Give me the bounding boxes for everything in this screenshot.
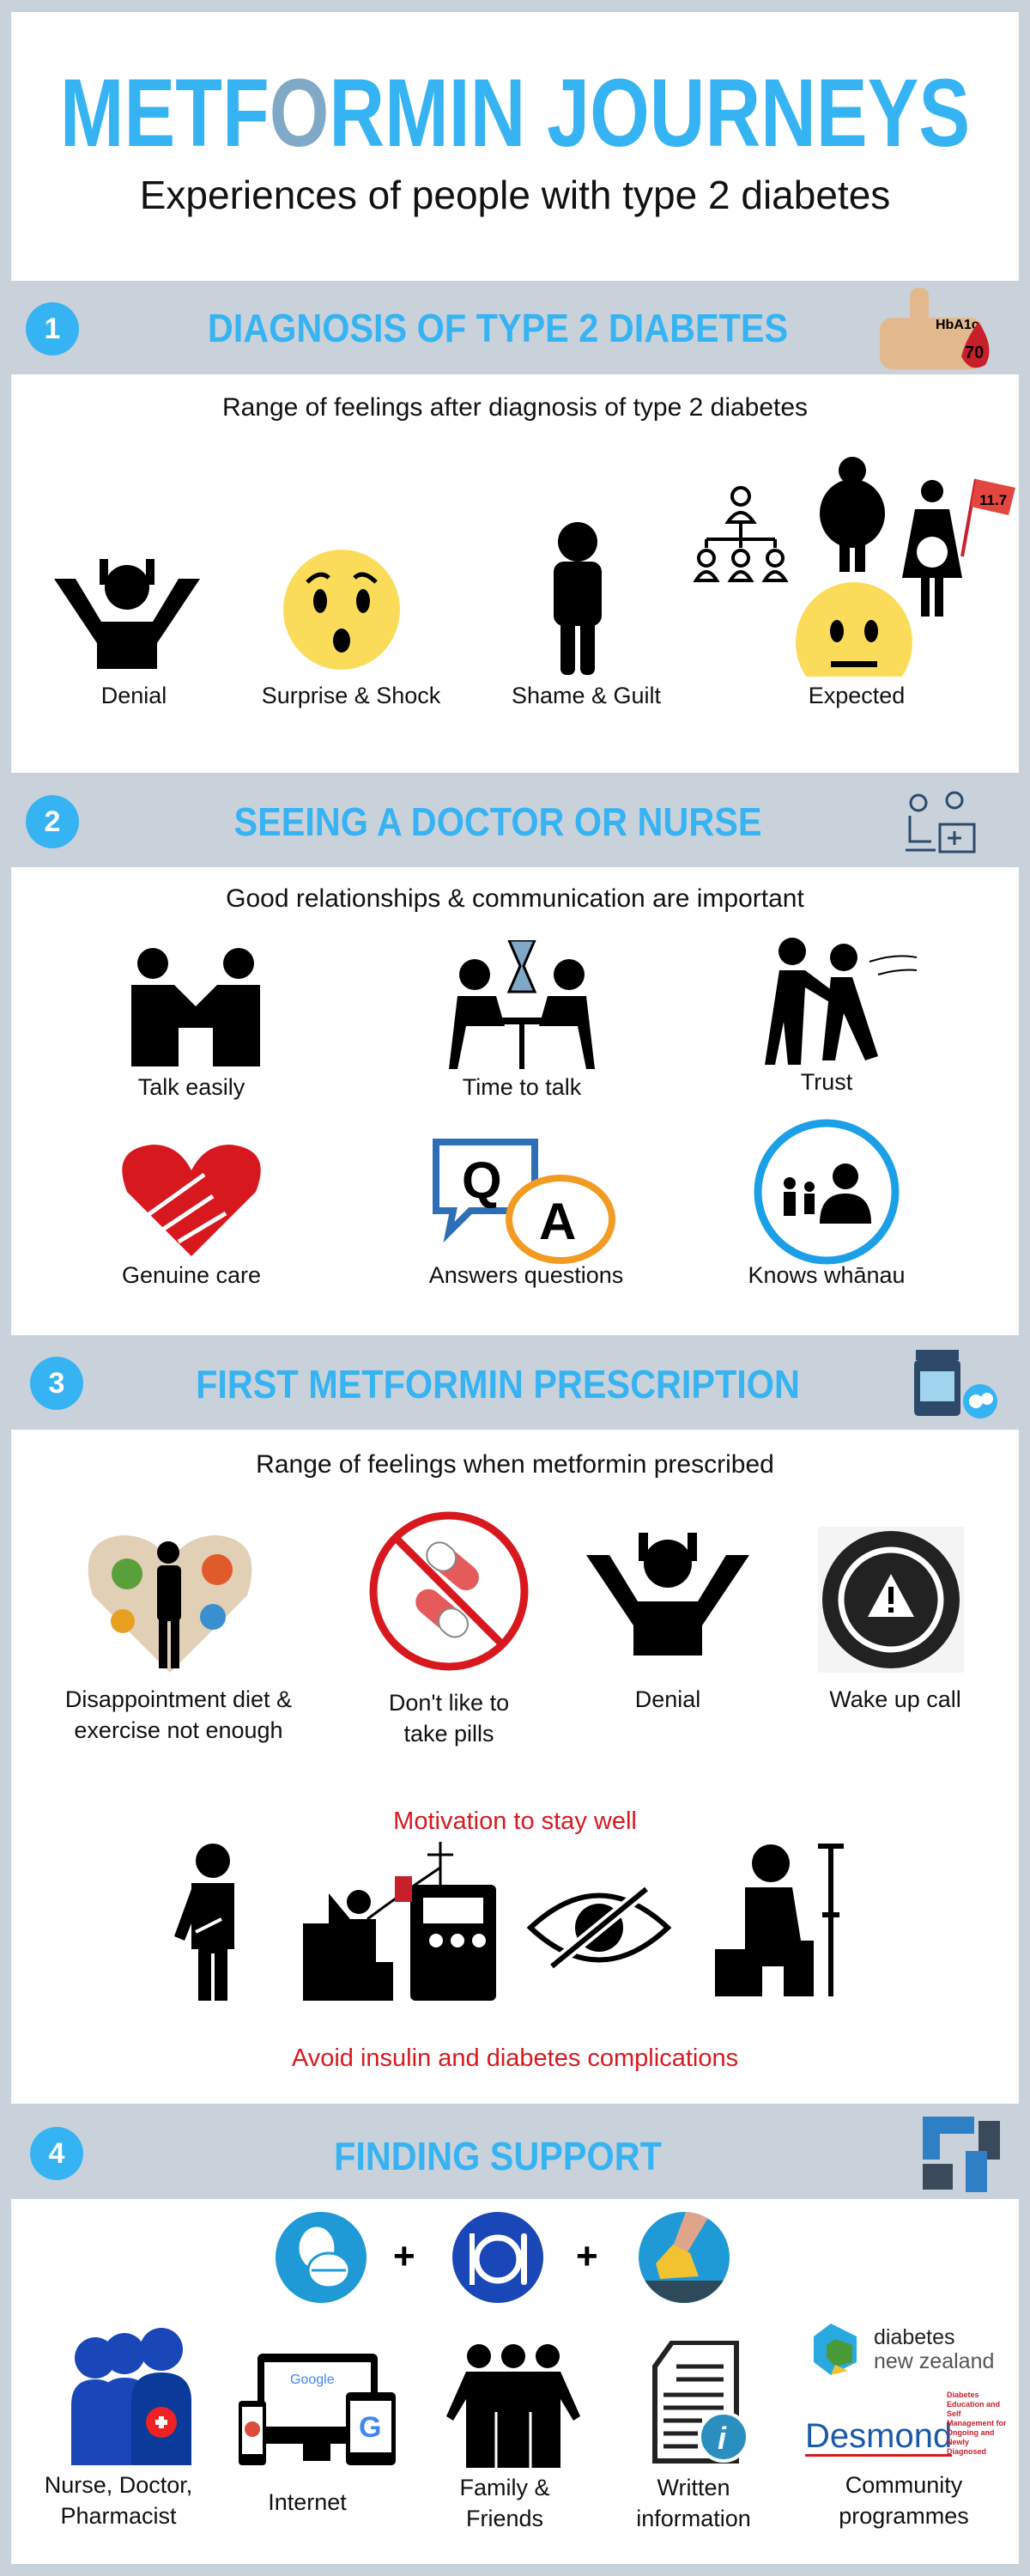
label: community [839,2472,969,2529]
icon: talk easily [131,948,260,1066]
section 1 header: 1 [45,313,60,345]
title: METFORMIN JOURNEYS [60,59,970,167]
icon: expected group [694,457,1015,677]
icon: community logos: Education and [947,2400,1000,2409]
label: nurse doctor pharmacist [45,2472,192,2529]
label: disappointment: Disappointment diet & [65,1686,292,1712]
section 4 header: 4 [49,2137,64,2170]
text: range of feelings: Range of feelings after diagnosis of type 2 diabetes [222,393,808,422]
icon: community logos: Ongoing and [947,2428,994,2437]
label: denial: Denial [101,683,167,708]
section 3 header: 3 [49,1367,64,1400]
label: time to talk: Time to talk [463,1074,581,1100]
icon: Q&A bubbles: A [539,1193,576,1250]
icon: shame [554,522,602,675]
icon: community logos: Desmond [805,2417,952,2455]
section 2 header: 2 [45,805,60,838]
label: surprise: Surprise & Shock [262,683,440,708]
text: good relationships: Good relationships & communication are important [226,884,804,913]
panel 2 [11,867,1019,1335]
label: nurse doctor pharmacist: Pharmacist [60,2503,177,2529]
label: genuine care: Genuine care [122,1262,261,1288]
icon: community logos: Diagnosed [947,2447,986,2456]
icon: community logos: Self [947,2409,961,2418]
label: denial: Denial [635,1686,700,1712]
icon: time to talk [449,940,595,1069]
panel 1 [11,374,1019,773]
icon: community logos [805,2324,1007,2457]
panel 4 [11,2199,1019,2564]
icon: wake up call [818,1527,964,1673]
icon: no pills [369,1511,529,1671]
icon: denial [54,559,200,669]
icon: family friends [446,2344,580,2468]
subtitle: Experiences of people with type 2 diabetes [140,173,890,217]
label: talk easily: Talk easily [138,1074,245,1100]
section 1 header [0,281,1030,374]
icon: blind eye [527,1887,671,1968]
header panel [11,12,1019,281]
label: family: Friends [466,2506,543,2531]
icon: community logos: Management for [947,2419,1007,2427]
section 3 header: FIRST METFORMIN PRESCRIPTION [196,1362,800,1406]
label: shame: Shame & Guilt [512,683,661,708]
label: community: programmes [839,2503,969,2529]
label: don't like pills: take pills [403,1721,494,1747]
label: internet: Internet [268,2489,347,2515]
icon: denial [586,1533,749,1656]
icon: genuine care [122,1145,261,1256]
label: expected: Expected [809,683,905,708]
icon: amputee with crutch [715,1844,844,1996]
icon: devices: G [359,2411,381,2444]
label: disappointment [65,1686,292,1743]
icon: community logos: Diabetes [947,2391,979,2399]
label: community: Community [845,2472,962,2498]
section 3 header [0,1335,1030,1430]
icon: shoe circle [639,2212,730,2303]
text: plus: + [576,2235,598,2277]
label: trust: Trust [801,1069,852,1095]
icon: devices: Google [290,2372,335,2387]
text: plus: + [393,2235,415,2277]
icon: dialysis [303,1842,496,2001]
icon: expected group: 11.7 [979,492,1007,508]
label: written: information [636,2506,751,2531]
icon: hba1c thumb [880,288,989,369]
icon: diet collage [88,1535,252,1673]
icon: health team [71,2328,191,2465]
label: don't like pills: Don't like to [389,1690,509,1716]
icon: pill jar [914,1350,997,1419]
icon: written information [652,2341,746,2464]
icon: Q&A bubbles [433,1139,615,1264]
icon: hba1c thumb: HbA1c [936,318,979,332]
section 4 header [0,2104,1030,2199]
label: wake up call: Wake up call [829,1686,961,1712]
icon: trust [765,938,917,1065]
icon: pills circle [276,2212,367,2303]
icon: knows whanau [754,1120,900,1264]
section 2 header: SEEING A DOCTOR OR NURSE [234,799,761,844]
text: motivation: Motivation to stay well [393,1807,637,1835]
label: nurse doctor pharmacist: Nurse, Doctor, [45,2472,192,2498]
icon: community logos: new zealand [874,2349,994,2373]
icon: injecting person [174,1844,234,2001]
icon: doctor desk [906,792,975,854]
icon: community logos: Newly [947,2438,969,2446]
label: don't like pills [389,1690,509,1747]
label: disappointment: exercise not enough [74,1717,283,1743]
icon: Q&A bubbles: Q [462,1151,502,1209]
icon: surprise face [283,550,400,670]
label: family [459,2475,549,2531]
section 4 header: FINDING SUPPORT [334,2134,662,2178]
section 2 header [0,773,1030,867]
label: family: Family & [459,2475,549,2500]
label: knows whanau: Knows whānau [748,1262,906,1288]
label: written [636,2475,751,2531]
icon: hba1c thumb: 70 [965,343,984,362]
text: feelings when prescribed: Range of feelings when metformin prescribed [256,1450,774,1479]
label: written: Written [657,2475,730,2500]
section 1 header: DIAGNOSIS OF TYPE 2 DIABETES [208,306,788,350]
icon: written information: i [718,2421,727,2456]
icon: plate circle [452,2212,543,2303]
panel 3 [11,1430,1019,2104]
icon: devices [239,2354,396,2465]
icon: community logos: diabetes [874,2325,955,2349]
icon: hands [923,2117,1000,2192]
label: answers: Answers questions [429,1262,623,1288]
text: avoid insulin: Avoid insulin and diabetes complications [292,2044,738,2072]
